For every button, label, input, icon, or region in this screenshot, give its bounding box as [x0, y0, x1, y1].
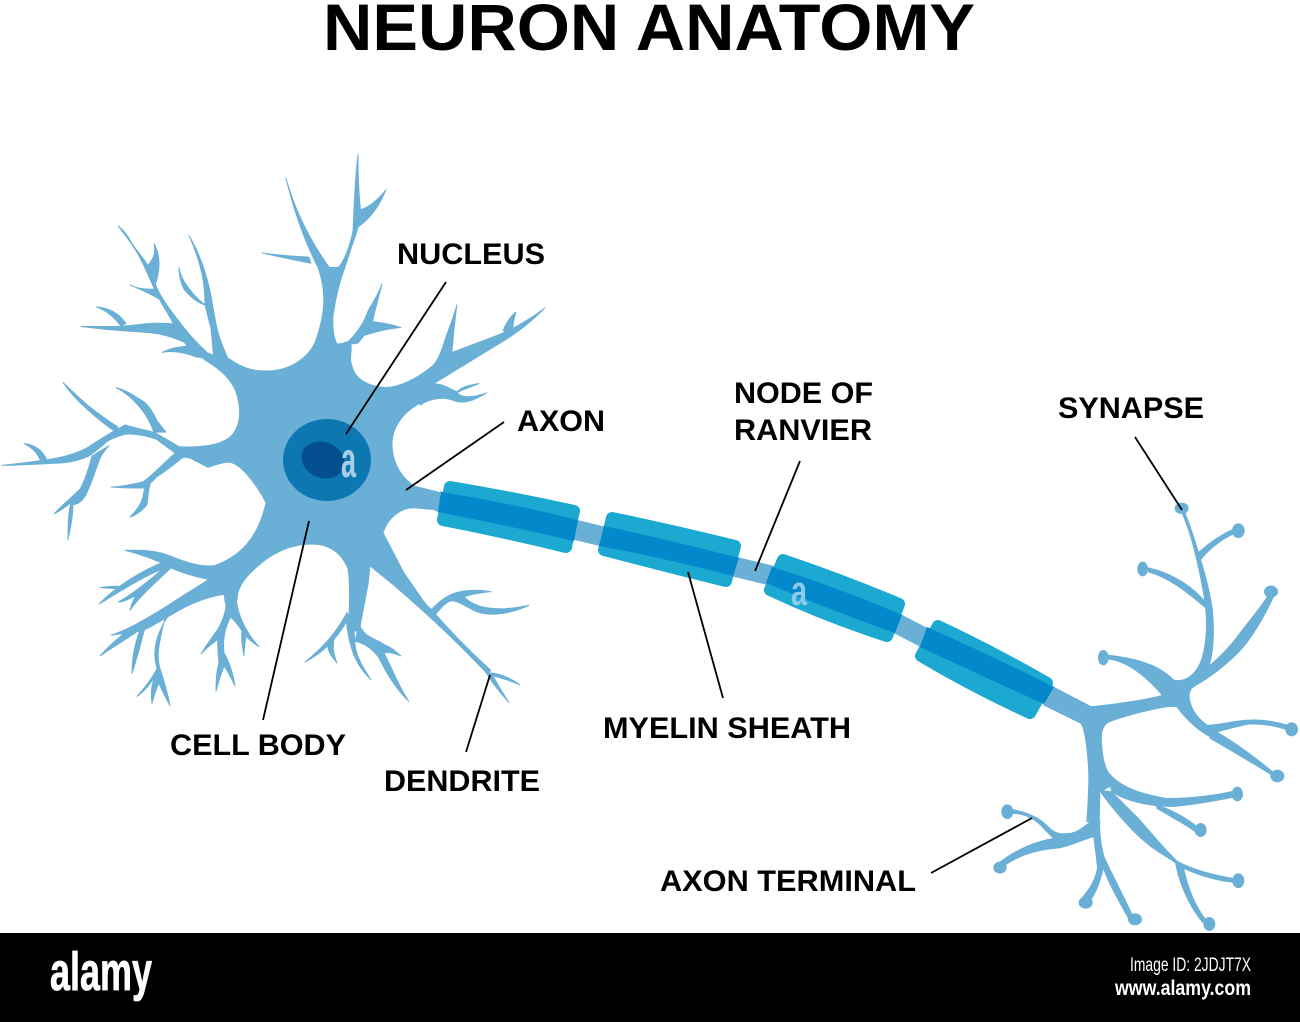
label: node of ranvier: NODE OF	[734, 377, 873, 410]
terminal trunk and hub	[1043, 668, 1220, 823]
terminal lower branch	[1082, 820, 1133, 918]
segment 1	[438, 487, 578, 547]
label: cell body	[170, 521, 346, 762]
label: node of ranvier: RANVIER	[734, 414, 872, 447]
footer url: www.alamy.com	[1114, 977, 1251, 1000]
axon terminal branches	[994, 503, 1298, 931]
dendrites: bottom	[305, 612, 409, 702]
dendrites: top	[262, 155, 386, 316]
label: dendrite	[384, 675, 540, 798]
myelin sheath segments	[438, 487, 1054, 713]
cell body	[179, 267, 500, 632]
terminal long branch	[1099, 790, 1183, 866]
terminal middle branch	[1107, 770, 1234, 807]
label: axon: AXON	[517, 405, 605, 438]
label: axon	[406, 405, 605, 490]
segment 3	[766, 560, 902, 636]
label: nucleus	[346, 238, 545, 434]
label: dendrite: DENDRITE	[384, 765, 540, 798]
label: nucleus: NUCLEUS	[397, 238, 545, 271]
synapse bulbs	[994, 503, 1298, 931]
segment 2	[599, 518, 739, 581]
neuron: axon fibre	[436, 500, 1092, 718]
terminal left branch	[997, 809, 1094, 867]
label: axon terminal	[660, 818, 1032, 898]
dendrites: upper right	[344, 284, 545, 405]
label: node of ranvier	[734, 377, 873, 571]
watermark letter on nucleus: a	[341, 432, 357, 488]
label: synapse	[1058, 392, 1204, 510]
label: cell body: CELL BODY	[170, 729, 346, 762]
segment 4	[920, 626, 1054, 713]
nucleus inner	[296, 435, 350, 485]
label: synapse: SYNAPSE	[1058, 392, 1204, 425]
footer logo: alamy	[50, 942, 152, 1002]
label: axon terminal: AXON TERMINAL	[660, 865, 916, 898]
neuron: cell body with dendrites	[2, 155, 545, 706]
terminal arms	[1108, 655, 1173, 697]
dendrites: lower right	[370, 533, 529, 703]
label: myelin sheath	[603, 572, 851, 745]
nucleus outer	[283, 419, 371, 501]
watermark letter on myelin: a	[791, 567, 807, 614]
terminal upper branch	[1180, 508, 1214, 680]
terminal lower right branches	[1208, 720, 1288, 732]
dendrites: lower left	[99, 550, 259, 706]
footer bar	[0, 933, 1300, 1022]
dendrites: left	[2, 382, 190, 540]
label: myelin sheath: MYELIN SHEATH	[603, 712, 851, 745]
dendrites: upper left	[81, 226, 229, 361]
terminal right arm	[1205, 595, 1274, 680]
footer image id: Image ID: 2JDJT7X	[1130, 955, 1251, 976]
